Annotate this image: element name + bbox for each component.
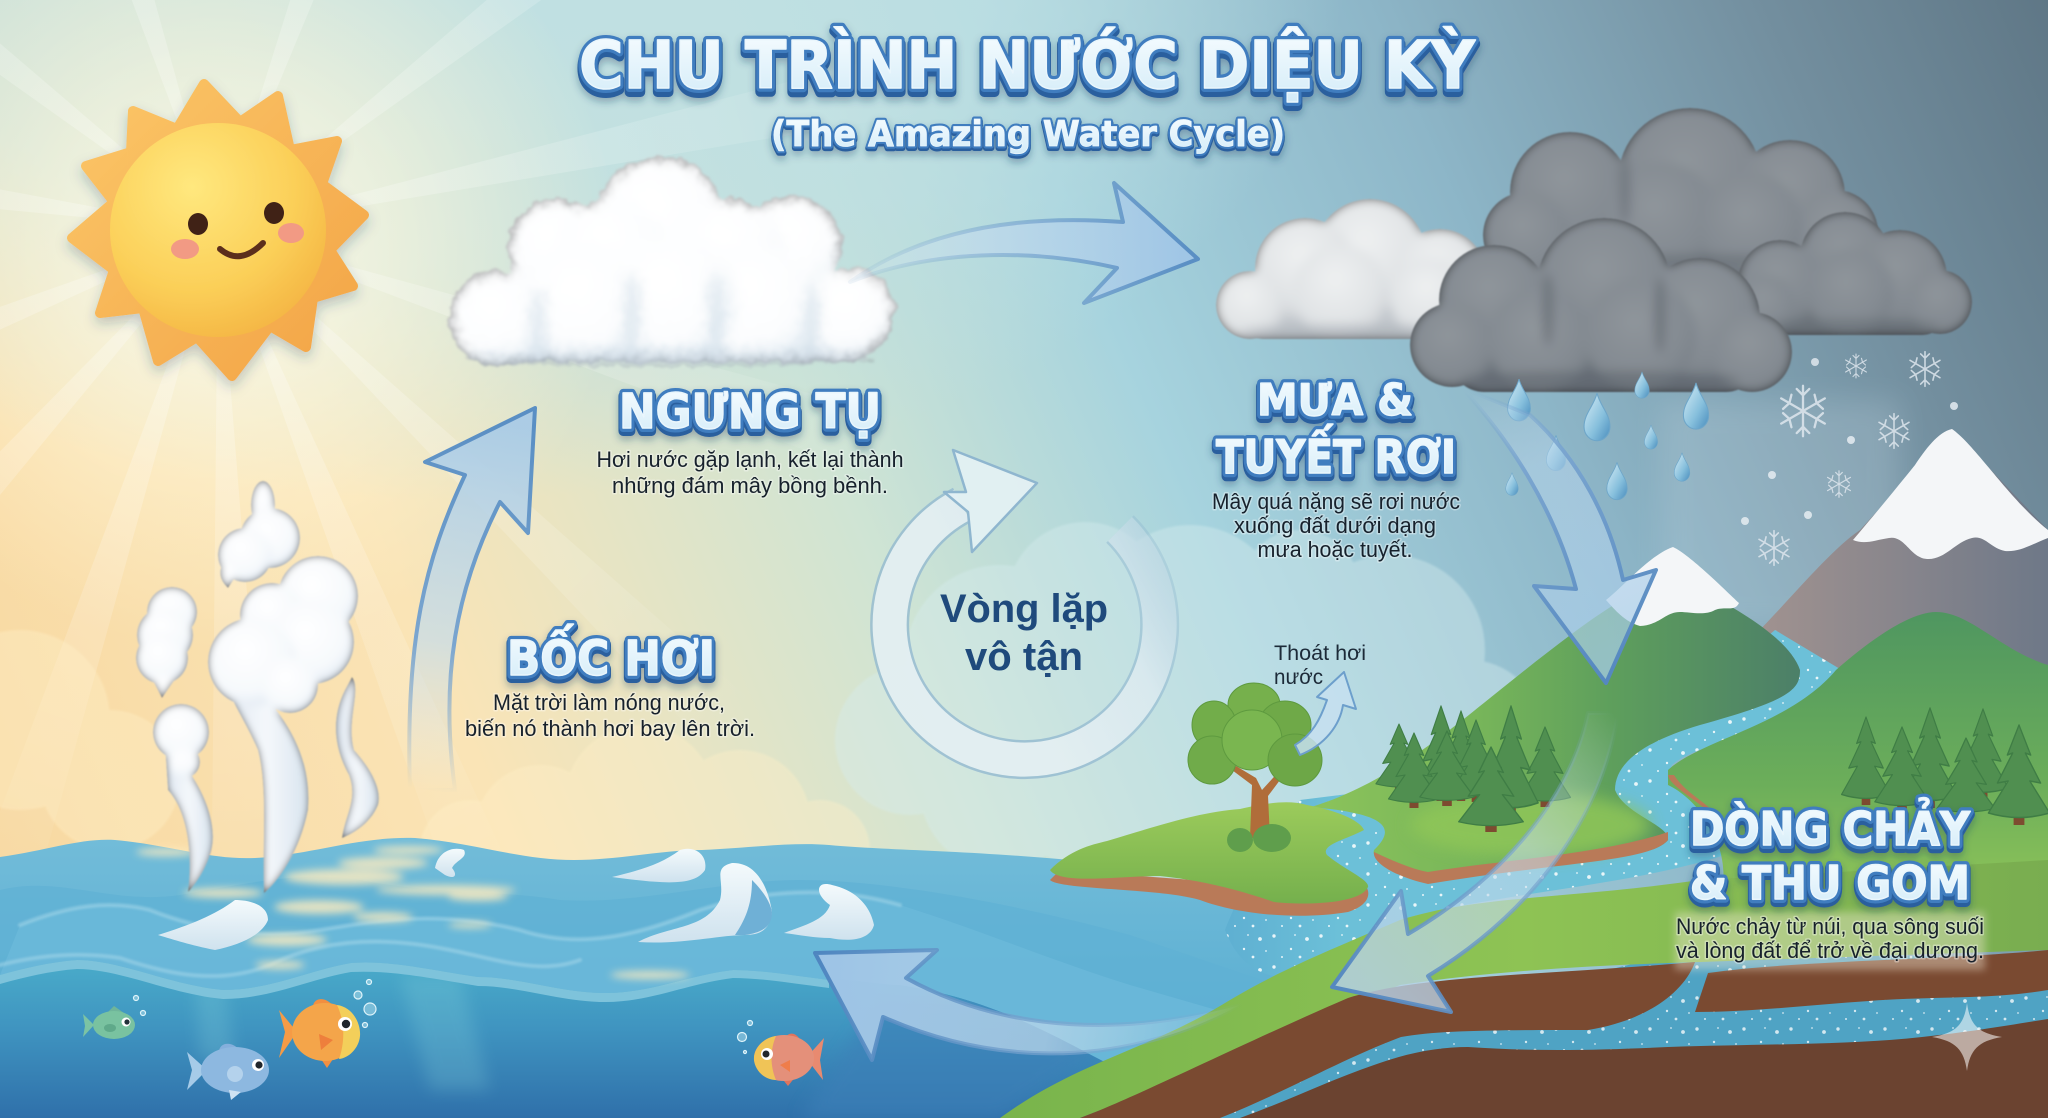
surface lip: [0, 960, 829, 1002]
wave layer middle: [0, 877, 1320, 1075]
heading: rain and snow: TUYẾT RƠI: [1216, 424, 1456, 484]
dark cloud right: [1735, 212, 1972, 335]
text: evaporation: Mặt trời làm nóng nước,: [493, 690, 725, 715]
arrow: evaporation up: [409, 408, 535, 790]
arrow: rain down: [1462, 388, 1656, 683]
subtitle: (The Amazing Water Cycle): [771, 116, 1285, 157]
sun rays: [0, 0, 990, 1013]
text: runoff: [1676, 914, 1984, 963]
sun glow: [0, 0, 618, 650]
tree island: [1050, 802, 1368, 916]
whitecap small left: [158, 900, 268, 950]
pine forest right: [1842, 708, 2048, 825]
text: runoff: và lòng đất để trở về đại dương.: [1676, 938, 1984, 963]
arrow: cloud to rain clouds: [850, 183, 1198, 303]
steam main plume: [208, 556, 358, 893]
sun face disc: [110, 123, 326, 337]
whitecap right: [784, 884, 874, 940]
heading: condensation: NGƯNG TỤ: [619, 384, 881, 440]
sparkle watermark: [1932, 1003, 2002, 1071]
right deep water: [800, 994, 1120, 1118]
right eye: [264, 202, 284, 224]
left eye: [188, 213, 208, 235]
heading: runoff: & THU GOM: [1690, 859, 1970, 913]
text: rain and snow: [1212, 489, 1460, 562]
wave layer front: [0, 892, 1320, 1075]
heading: runoff: DÒNG CHẢY: [1690, 797, 1971, 856]
brown soil upper: [1080, 962, 1695, 1118]
brown soil right: [1695, 950, 2048, 1012]
heading: rain and snow: MƯA &: [1257, 375, 1413, 426]
whitecap curl: [435, 849, 465, 877]
endless loop ring arrow: [890, 450, 1160, 760]
subtitle: (The Amazing Water Cycle): [771, 114, 1285, 155]
arrow: back to ocean: [815, 950, 1240, 1060]
text: rain and snow: xuống đất dưới dạng: [1234, 513, 1436, 538]
text: condensation: những đám mây bồng bềnh.: [612, 473, 888, 498]
label: transpiration: Thoát hơi: [1274, 642, 1366, 665]
heading: evaporation: BỐC HƠI: [507, 624, 715, 687]
green mountain: [1300, 547, 1800, 884]
whitecap large: [638, 863, 772, 943]
title: CHU TRÌNH NƯỚC DIỆU KỲ: [579, 26, 1476, 104]
rain streaks: [1660, 400, 1900, 630]
water channel: [1210, 950, 2048, 1118]
heading: rain and snow: [1216, 375, 1456, 487]
arrow: transpiration: [1295, 672, 1356, 755]
heading: rain and snow: MƯA &: [1257, 378, 1413, 429]
steam top puff: [218, 481, 300, 588]
light grey cloud: [1216, 199, 1486, 339]
heading: rain and snow: MƯA &: [1257, 375, 1413, 426]
pine forest centre: [1376, 706, 1570, 832]
heading: runoff: DÒNG CHẢY: [1690, 797, 1971, 856]
heading: runoff: DÒNG CHẢY: [1690, 800, 1971, 859]
right hill: [1668, 612, 2048, 900]
fish: orange: [279, 999, 360, 1068]
heading: runoff: & THU GOM: [1690, 856, 1970, 910]
loop label: Vòng lặp: [940, 587, 1108, 631]
label: transpiration: nước: [1274, 666, 1323, 689]
sun: [72, 84, 364, 376]
heading: runoff: & THU GOM: [1690, 856, 1970, 910]
text: condensation: [596, 447, 904, 498]
small mountain snow: [1606, 547, 1739, 626]
white cloud: [449, 156, 895, 367]
title: CHU TRÌNH NƯỚC DIỆU KỲ: [579, 26, 1476, 104]
heading: condensation: NGƯNG TỤ: [619, 384, 881, 440]
tree: [1188, 683, 1322, 852]
wave crest lines: [0, 892, 900, 976]
background pale clouds centre: [835, 522, 1540, 870]
background pale clouds left: [0, 630, 870, 900]
top-left sky tint: [0, 0, 1350, 500]
ocean: [0, 838, 1320, 1118]
title: CHU TRÌNH NƯỚC DIỆU KỲ: [579, 30, 1476, 108]
arrow: runoff down: [1332, 713, 1618, 1012]
sun reflections: [136, 846, 690, 979]
ocean surface: [0, 838, 1320, 1075]
heading: evaporation: BỐC HƠI: [507, 624, 715, 687]
fish: green: [83, 1006, 135, 1039]
snowflakes: [1741, 352, 1958, 565]
back mountain snow: [1853, 429, 2048, 559]
heading: runoff: [1690, 797, 1971, 913]
text: rain and snow: Mây quá nặng sẽ rơi nước: [1212, 489, 1460, 514]
heading: evaporation: BỐC HƠI: [507, 627, 715, 690]
text glow: runoff: [1675, 912, 1985, 970]
label: transpiration: [1274, 642, 1366, 689]
river: [1225, 630, 1845, 978]
text: evaporation: biến nó thành hơi bay lên trời.: [465, 716, 755, 741]
steam left swirl: [153, 704, 213, 892]
back mountain: [1750, 429, 2048, 720]
heading: rain and snow: TUYẾT RƠI: [1216, 424, 1456, 484]
underwater: [0, 940, 1320, 1118]
text: rain and snow: mưa hoặc tuyết.: [1258, 537, 1412, 562]
tree crown: [1188, 683, 1322, 786]
mountain lower meadow: [1410, 793, 1650, 857]
subtitle: (The Amazing Water Cycle): [771, 114, 1285, 155]
loop label: vô tận: [965, 635, 1083, 679]
dark cloud back: [1483, 108, 1878, 278]
fish: red: [754, 1034, 824, 1086]
heading: condensation: NGƯNG TỤ: [619, 387, 881, 443]
meadow bank: [1374, 832, 1668, 884]
right cheek: [278, 223, 304, 243]
heading: rain and snow: TUYẾT RƠI: [1216, 427, 1456, 487]
loop label: [940, 587, 1108, 679]
sun spikes: [72, 84, 364, 376]
text: condensation: Hơi nước gặp lạnh, kết lại thành: [596, 447, 904, 472]
tree bushes: [1227, 824, 1291, 852]
text: evaporation: [465, 690, 755, 741]
steam right wisp: [336, 677, 379, 838]
tree trunk: [1232, 766, 1286, 838]
steam left puff: [136, 587, 197, 698]
bubbles: [134, 980, 752, 1054]
lower green bank: [1000, 860, 2048, 1118]
light shafts: [195, 975, 490, 1090]
rain drops: [1506, 372, 1709, 500]
whitecap long: [612, 849, 705, 882]
right hill bank: [1668, 775, 1730, 838]
dark cloud front: [1410, 218, 1792, 392]
left cheek: [171, 239, 199, 259]
smile: [220, 243, 263, 256]
whitecaps: [158, 849, 874, 950]
fish: blue: [187, 1044, 269, 1100]
text: runoff: Nước chảy từ núi, qua sông suối: [1676, 914, 1984, 939]
brown soil bottom: [1240, 1019, 2048, 1118]
steam: [136, 481, 379, 893]
